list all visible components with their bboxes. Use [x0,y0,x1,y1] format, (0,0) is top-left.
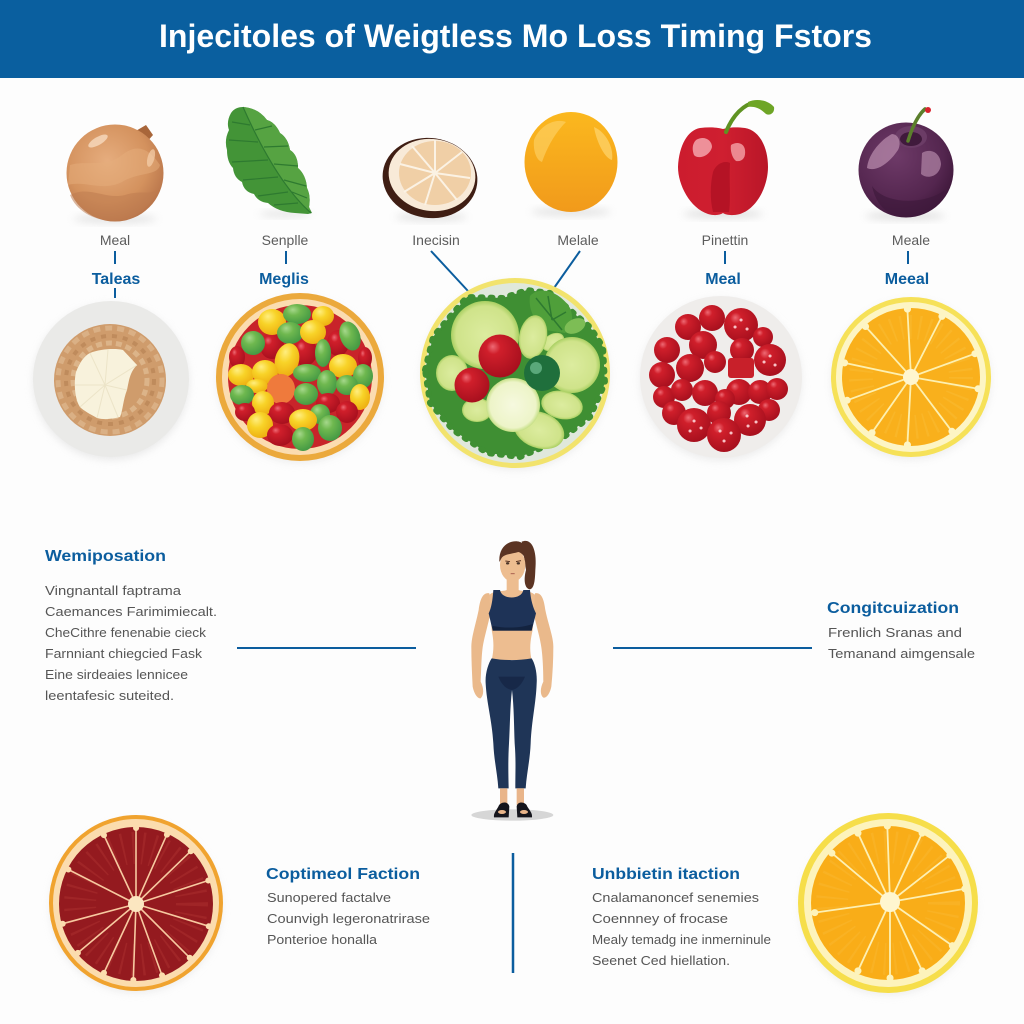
label: Taleas: Taleas [92,271,140,288]
heading: Wemiposation: Wemiposation [45,548,166,565]
icon: green leaf [226,107,312,217]
body line two: Counvigh legeronatrirase [267,911,430,926]
body lines: Eine sirdeaies lennicee [45,667,188,682]
label: Melale: Melale [557,232,599,248]
plate: green salad [420,278,610,470]
body lines: Farnniant chiegcied Fask [45,646,203,661]
label: Meglis: Meglis [259,271,309,288]
heading: Unbbietin itaction: Unbbietin itaction [592,866,740,883]
grapefruit slice [49,815,223,993]
label: Pinettin: Pinettin [702,232,748,248]
bottom right text block [592,866,771,968]
orange slice, large [798,813,978,995]
bottom left text block [266,866,430,947]
label: Meeal bold: Meeal [885,271,929,288]
right text block [827,600,975,661]
body line one: Sunopered factalve [267,890,391,905]
body line one: Frenlich Sranas and [828,625,962,640]
body lines [45,583,217,703]
body lines: Vingnantall faptrama [45,583,182,598]
figure: standing woman [471,541,553,821]
heading: Congitcuization: Congitcuization [827,600,959,617]
plate: pomegranate seeds [640,296,802,461]
body lines: CheCithre fenenabie cieck [45,625,207,640]
body line three: Ponterioe honalla [267,932,378,947]
bowl: colorful beans [216,293,384,463]
body lines: leentafesic suteited. [45,688,174,703]
label: Meal: Meal [100,232,130,248]
body line three: Mealy temadg ine inmerninule [592,932,771,947]
heading: Coptimeol Faction: Coptimeol Faction [266,866,420,883]
body line two: Coennney of frocase [592,911,728,926]
label: Meal bold: Meal [705,271,741,288]
header banner [0,0,1024,78]
label: Inecisin: Inecisin [412,232,460,248]
connector lines [115,251,908,298]
icon: onion [66,124,164,223]
horizontal divider lines beside figure [237,647,812,649]
icon: orange [524,112,618,216]
icon: purple plum [858,107,954,220]
plate: oats with cream [33,301,189,460]
icon: halved coconut [377,132,483,224]
label: Senplle: Senplle [262,232,309,248]
body line one: Cnalamanoncef senemies [592,890,760,905]
left text block [45,548,217,703]
body lines: Caemances Farimimiecalt. [45,604,217,619]
body line two: Temanand aimgensale [828,646,975,661]
label: Meale: Meale [892,232,930,248]
body line four: Seenet Ced hiellation. [592,953,730,968]
icon: red apple [678,100,774,218]
plate: orange slice [831,297,991,460]
vertical divider [512,853,514,973]
title: Injecitoles of Weigtless Mo Loss Timing Fstors [159,18,872,54]
